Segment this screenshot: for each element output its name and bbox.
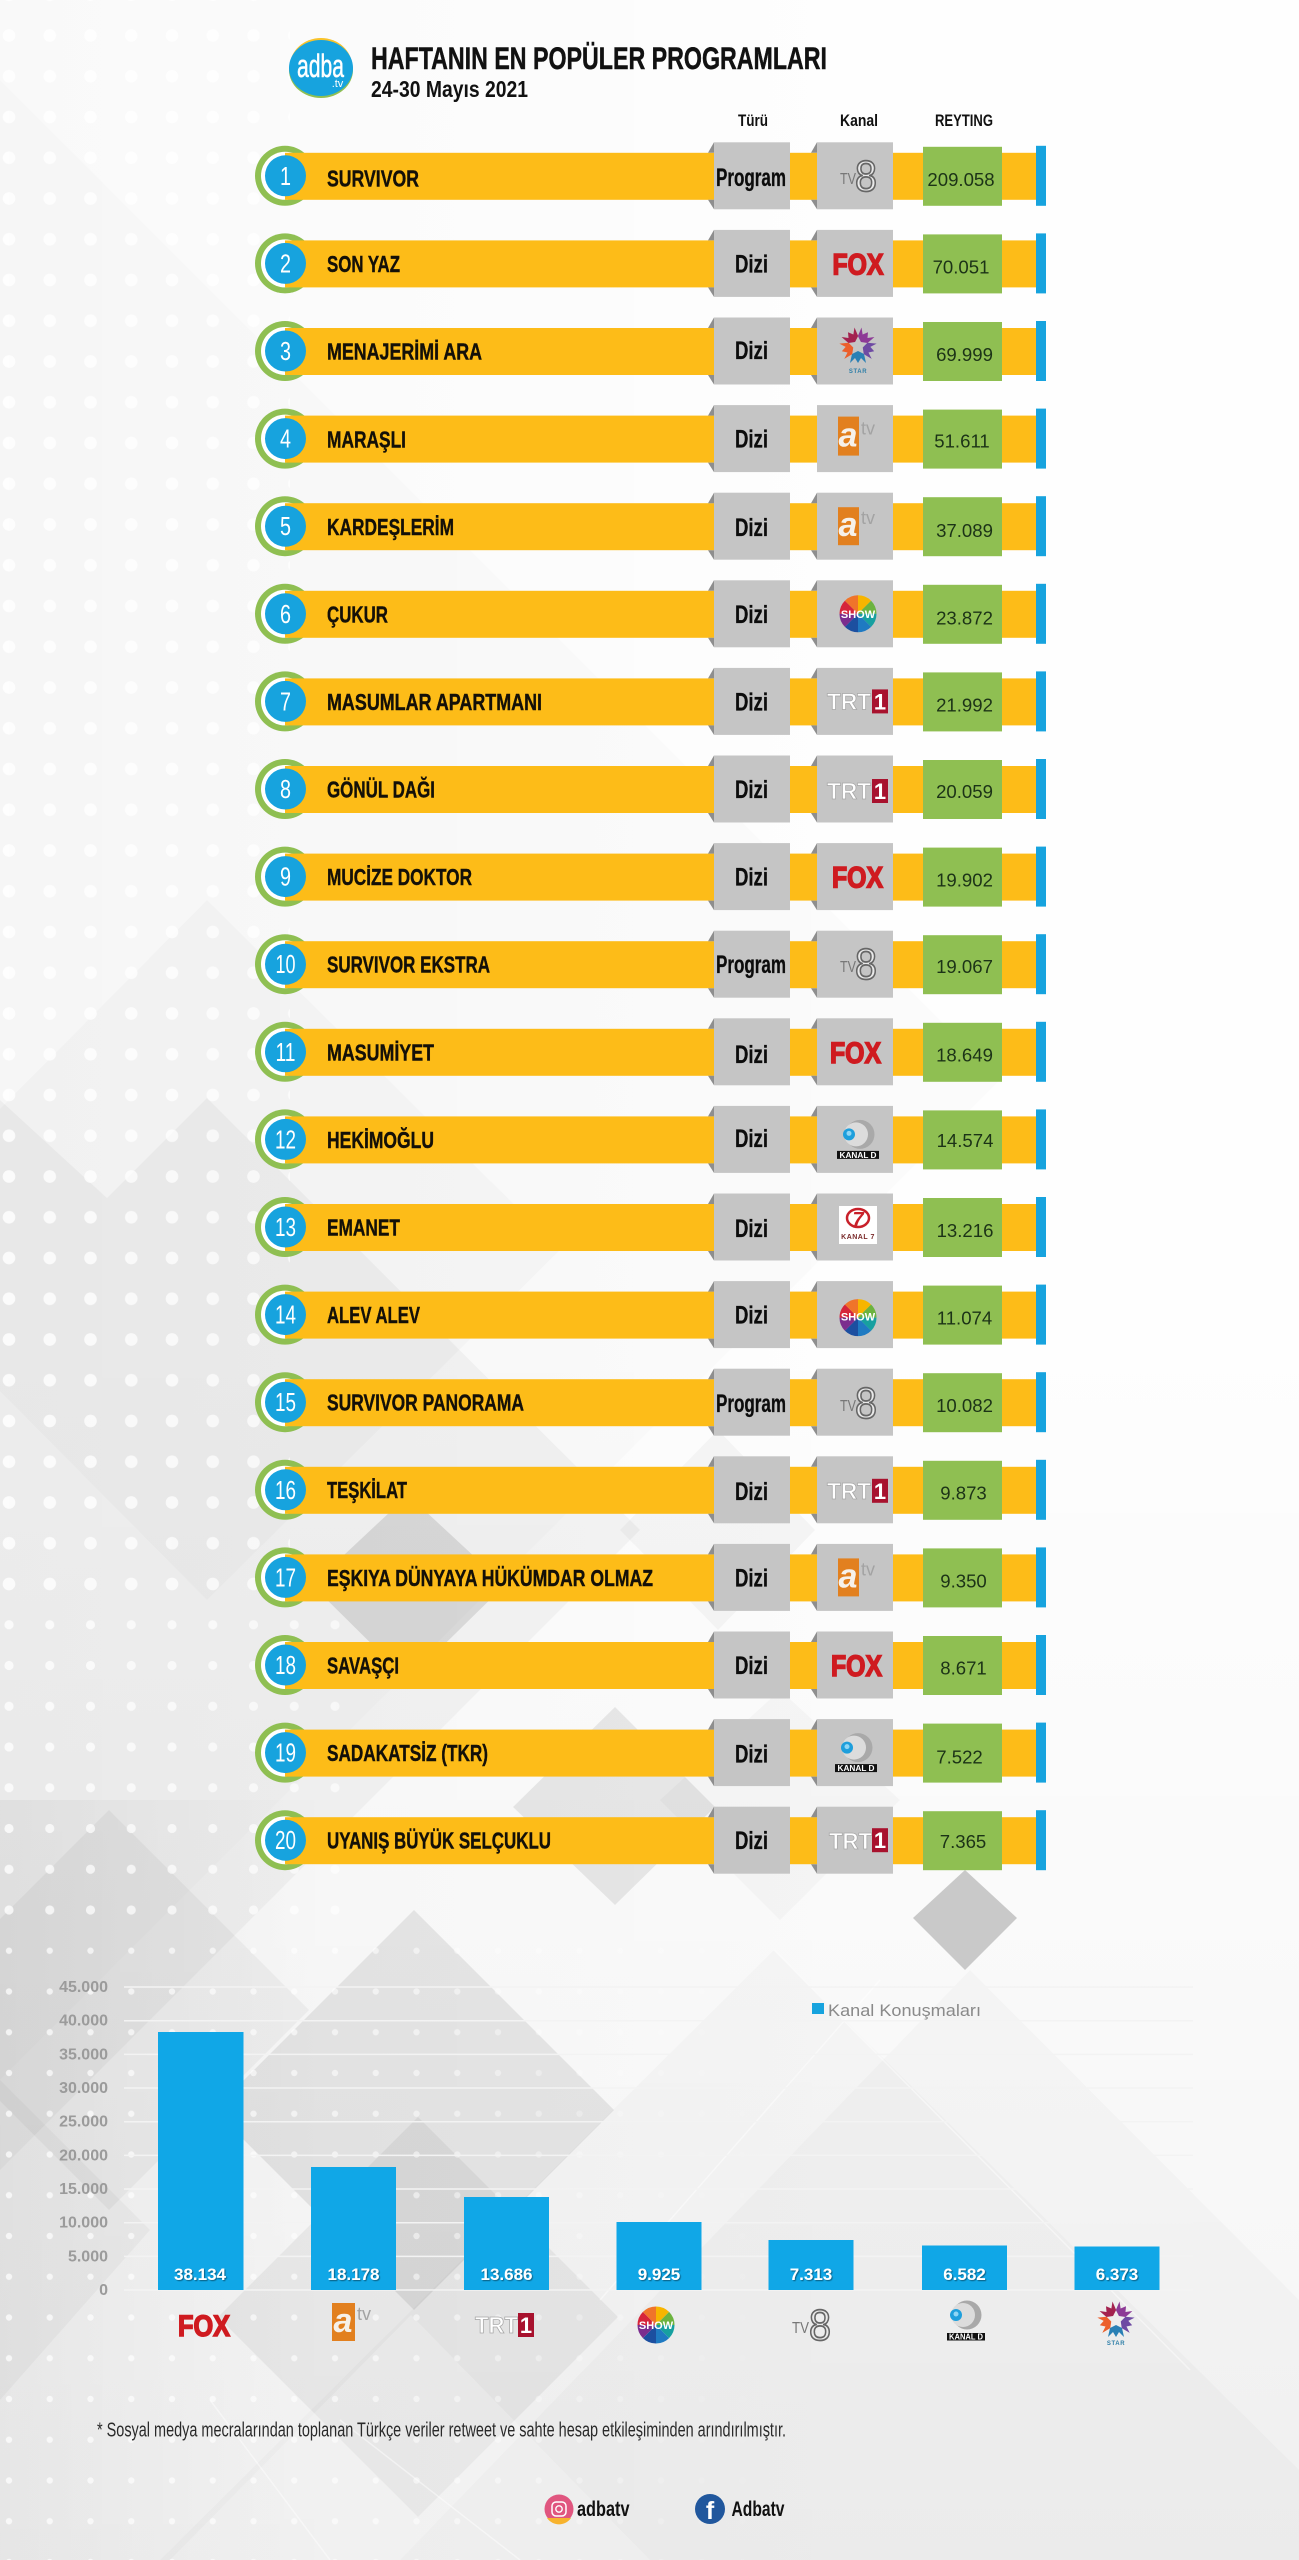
y axis labels: 20.000	[59, 2147, 108, 2164]
channel: SHOW	[839, 1299, 876, 1336]
rank: 11	[276, 1037, 296, 1067]
row 6	[255, 580, 1046, 647]
rating: 7.365	[940, 1831, 986, 1852]
channel: atv: tv	[861, 419, 875, 439]
name: MASUMLAR APARTMANI	[327, 689, 542, 715]
bar: TRT 1: 13.686	[480, 2265, 532, 2284]
bar: SHOW	[616, 2222, 702, 2290]
bar: Kanal D	[922, 2246, 1007, 2290]
rank: 14	[275, 1300, 296, 1330]
row 10	[255, 931, 1046, 998]
rank: 10	[276, 949, 296, 979]
rating: 9.873	[940, 1482, 987, 1503]
channel: TV8: TV	[840, 1398, 856, 1415]
name: EŞKIYA DÜNYAYA HÜKÜMDAR OLMAZ	[327, 1565, 653, 1591]
bar: STAR: 6.373	[1096, 2265, 1138, 2284]
instagram handle	[544, 2494, 630, 2524]
channel: TV8	[840, 1379, 877, 1428]
rating: 69.999	[936, 344, 993, 365]
rank: 9	[280, 862, 291, 892]
rating: 8.671	[940, 1658, 987, 1678]
date subtitle: 24-30 Mayıs 2021	[371, 76, 528, 102]
axis logo: Kanal D	[947, 2300, 985, 2342]
axis logo: TV8: TV	[792, 2320, 809, 2337]
rating: 14.574	[937, 1130, 993, 1151]
row 4	[255, 405, 1046, 472]
bar: atv	[311, 2167, 396, 2290]
rank: 19	[275, 1738, 296, 1768]
channel: Kanal D	[835, 1733, 877, 1773]
rank: 3	[280, 336, 291, 366]
row 12	[255, 1106, 1046, 1173]
name: SURVIVOR PANORAMA	[327, 1390, 524, 1416]
type: Dizi	[735, 689, 768, 716]
title: HAFTANIN EN POPÜLER PROGRAMLARI	[371, 40, 827, 76]
name: MENAJERİMİ ARA	[327, 338, 482, 364]
row 2	[255, 230, 1046, 297]
rating: 70.051	[933, 256, 989, 277]
channel: atv	[838, 506, 875, 545]
type: Dizi	[735, 1126, 768, 1153]
axis logo: STAR	[1097, 2302, 1135, 2347]
channel: STAR	[839, 328, 877, 375]
name: UYANIŞ BÜYÜK SELÇUKLU	[327, 1828, 551, 1854]
name: SURVIVOR EKSTRA	[327, 952, 490, 978]
rating: 23.872	[936, 607, 993, 628]
bar: Kanal D: 6.582	[943, 2265, 986, 2284]
type: Dizi	[735, 251, 768, 278]
axis logo: Kanal D: KANAL D	[949, 2333, 983, 2342]
rating: 19.902	[936, 870, 993, 891]
axis logo: SHOW	[637, 2306, 674, 2344]
channel: Kanal D: KANAL D	[840, 1151, 877, 1160]
type: Dizi	[735, 427, 768, 454]
channel: TRT 1: TRT	[827, 778, 871, 804]
rating: 21.992	[936, 694, 993, 715]
dot pattern	[2, 926, 578, 2560]
channel: FOX: FOX	[832, 248, 884, 281]
rank: 7	[280, 686, 291, 716]
channel: TV8: TV	[840, 171, 856, 188]
rating: 10.082	[936, 1395, 993, 1416]
row 16	[255, 1456, 1046, 1523]
type: Dizi	[735, 1742, 768, 1769]
row 19	[255, 1719, 1046, 1786]
channel: TRT 1: TRT	[829, 1828, 872, 1854]
y axis labels: 45.000	[59, 1979, 108, 1996]
row 20	[255, 1807, 1046, 1874]
channel: TRT 1: 1	[874, 1828, 886, 1853]
y axis labels: 35.000	[59, 2046, 108, 2063]
row 18	[255, 1632, 1046, 1698]
bar: TV8: 7.313	[790, 2265, 832, 2284]
channel: Kanal D: KANAL D	[838, 1764, 875, 1773]
rating: 18.649	[936, 1044, 993, 1065]
channel: atv: a	[839, 506, 857, 544]
row 14	[255, 1281, 1046, 1348]
column heading: channel: Kanal	[840, 111, 878, 130]
name: MASUMİYET	[327, 1039, 434, 1065]
channel: FOX: FOX	[831, 1650, 882, 1683]
rank: 4	[280, 424, 291, 454]
bar: TRT 1	[464, 2197, 549, 2290]
channel: TV8: 8	[855, 152, 877, 201]
rank: 2	[280, 248, 291, 278]
name: ÇUKUR	[327, 601, 388, 627]
channel: Kanal 7: KANAL 7	[841, 1234, 875, 1241]
row 3	[255, 318, 1046, 384]
axis logo: atv: tv	[357, 2304, 371, 2324]
rank: 15	[275, 1387, 296, 1417]
bar chart: channel mentions	[59, 1979, 1193, 2350]
adba.tv logo	[289, 38, 353, 98]
name: HEKİMOĞLU	[327, 1126, 434, 1153]
rank: 8	[280, 774, 291, 804]
channel: TV8: 8	[855, 1379, 877, 1428]
axis logo: TRT 1: TRT	[475, 2312, 518, 2338]
type: Dizi	[735, 777, 768, 804]
type: Dizi	[735, 1828, 768, 1855]
adba.tv logo: .tv	[332, 78, 344, 90]
axis logo: atv: a	[334, 2302, 352, 2340]
rank: 12	[275, 1124, 296, 1154]
channel: atv: tv	[861, 1559, 875, 1579]
bar: FOX	[158, 2032, 244, 2290]
channel: TRT 1: TRT	[827, 1478, 871, 1504]
axis logo: TV8	[792, 2301, 831, 2350]
rank: 17	[275, 1562, 296, 1592]
rank: 18	[275, 1650, 296, 1680]
channel: SHOW	[839, 595, 876, 632]
axis logo: STAR: STAR	[1107, 2341, 1125, 2347]
rating: 13.216	[937, 1220, 993, 1241]
channel: SHOW: SHOW	[841, 1312, 876, 1324]
type: Dizi	[735, 1565, 768, 1592]
y axis labels: 0	[99, 2282, 108, 2299]
axis logo: TRT 1: 1	[520, 2313, 532, 2338]
row 9	[255, 843, 1046, 910]
axis logo: TV8: 8	[809, 2301, 831, 2350]
y axis labels: 25.000	[59, 2114, 108, 2131]
axis logo: FOX: FOX	[178, 2310, 230, 2343]
type: Dizi	[735, 338, 768, 365]
axis logo: atv	[332, 2302, 371, 2341]
type: Program	[716, 952, 786, 979]
rank: 1	[280, 161, 291, 191]
channel: FOX: FOX	[830, 1037, 881, 1070]
channel: Kanal 7: 7	[852, 1209, 864, 1231]
row 7	[255, 668, 1046, 735]
channel: TV8	[840, 152, 877, 201]
name: GÖNÜL DAĞI	[327, 776, 435, 802]
type: Dizi	[735, 602, 768, 629]
channel: atv	[838, 1557, 875, 1596]
bar: FOX: 38.134	[174, 2265, 227, 2284]
y axis labels: 5.000	[68, 2248, 108, 2265]
name: ALEV ALEV	[327, 1302, 420, 1328]
name: MARAŞLI	[327, 427, 406, 453]
rating: 209.058	[927, 169, 995, 190]
channel: atv: a	[839, 417, 857, 455]
type: Program	[716, 1391, 786, 1418]
channel: TV8	[840, 940, 877, 989]
channel: TRT 1: 1	[874, 689, 886, 714]
channel: TRT 1: TRT	[827, 688, 871, 714]
channel: TV8: TV	[840, 959, 856, 976]
rating: 37.089	[936, 520, 993, 541]
channel: STAR: STAR	[849, 369, 867, 375]
channel: atv	[838, 417, 875, 456]
bar: TV8	[768, 2240, 854, 2290]
column heading: type: Türü	[738, 111, 768, 130]
name: MUCİZE DOKTOR	[327, 864, 472, 890]
facebook handle: f	[706, 2497, 715, 2525]
channel: FOX: FOX	[832, 862, 883, 895]
rating: 51.611	[934, 431, 990, 452]
channel: Kanal D	[837, 1120, 879, 1160]
type: Dizi	[735, 1216, 768, 1243]
instagram handle: adbatv	[577, 2498, 630, 2521]
facebook handle	[695, 2494, 785, 2525]
bar: SHOW: 9.925	[638, 2265, 680, 2284]
rank: 6	[280, 599, 291, 629]
legend: Kanal Konuşmaları	[828, 2001, 981, 2020]
bar: STAR	[1074, 2246, 1160, 2290]
name: KARDEŞLERİM	[327, 514, 454, 540]
rating: 11.074	[937, 1308, 992, 1329]
y axis labels: 40.000	[59, 2013, 108, 2030]
channel: TRT 1: 1	[874, 779, 886, 804]
channel: Kanal 7	[839, 1206, 877, 1244]
rank: 16	[275, 1475, 296, 1505]
channel: atv: a	[839, 1557, 857, 1595]
type: Dizi	[735, 865, 768, 892]
bar: atv: 18.178	[328, 2265, 380, 2284]
channel: TRT 1: 1	[874, 1479, 886, 1504]
name: SURVIVOR	[327, 165, 419, 191]
rating: 19.067	[936, 956, 993, 977]
rating: 20.059	[936, 781, 993, 802]
name: EMANET	[327, 1214, 400, 1240]
channel: TV8: 8	[855, 940, 877, 989]
y axis labels: 15.000	[59, 2181, 108, 2198]
name: TEŞKİLAT	[327, 1477, 407, 1503]
column heading: rating: REYTING	[935, 111, 993, 130]
channel: atv: tv	[861, 508, 875, 528]
row 13	[255, 1194, 1046, 1260]
type: Dizi	[735, 1653, 768, 1680]
rank: 5	[280, 511, 291, 541]
row 11	[255, 1018, 1046, 1085]
footnote: * Sosyal medya mecralarından toplanan Türkçe veriler retweet ve sahte hesap etkileşiminden arındırılmıştır.	[97, 2420, 786, 2442]
y axis labels: 30.000	[59, 2080, 108, 2097]
row 8	[255, 756, 1046, 822]
rating: 7.522	[936, 1747, 983, 1768]
name: SADAKATSİZ (TKR)	[327, 1740, 488, 1766]
axis logo: SHOW: SHOW	[639, 2320, 674, 2332]
facebook handle: Adbatv	[732, 2498, 785, 2521]
rank: 13	[275, 1212, 296, 1242]
type: Dizi	[735, 1303, 768, 1330]
rating: 9.350	[940, 1570, 987, 1591]
channel: SHOW: SHOW	[841, 609, 876, 621]
name: SAVAŞÇI	[327, 1652, 399, 1678]
name: SON YAZ	[327, 251, 400, 277]
row 15	[255, 1369, 1046, 1436]
rank: 20	[275, 1825, 296, 1855]
type: Dizi	[735, 1479, 768, 1506]
row 17	[255, 1544, 1046, 1611]
type: Dizi	[735, 1042, 768, 1069]
adba.tv logo: adba	[297, 48, 344, 84]
type: Program	[716, 165, 786, 192]
y axis labels: 10.000	[59, 2215, 108, 2232]
y axis labels	[59, 1979, 108, 2299]
type: Dizi	[735, 515, 768, 542]
row 5	[255, 493, 1046, 560]
row 1	[255, 142, 1046, 209]
